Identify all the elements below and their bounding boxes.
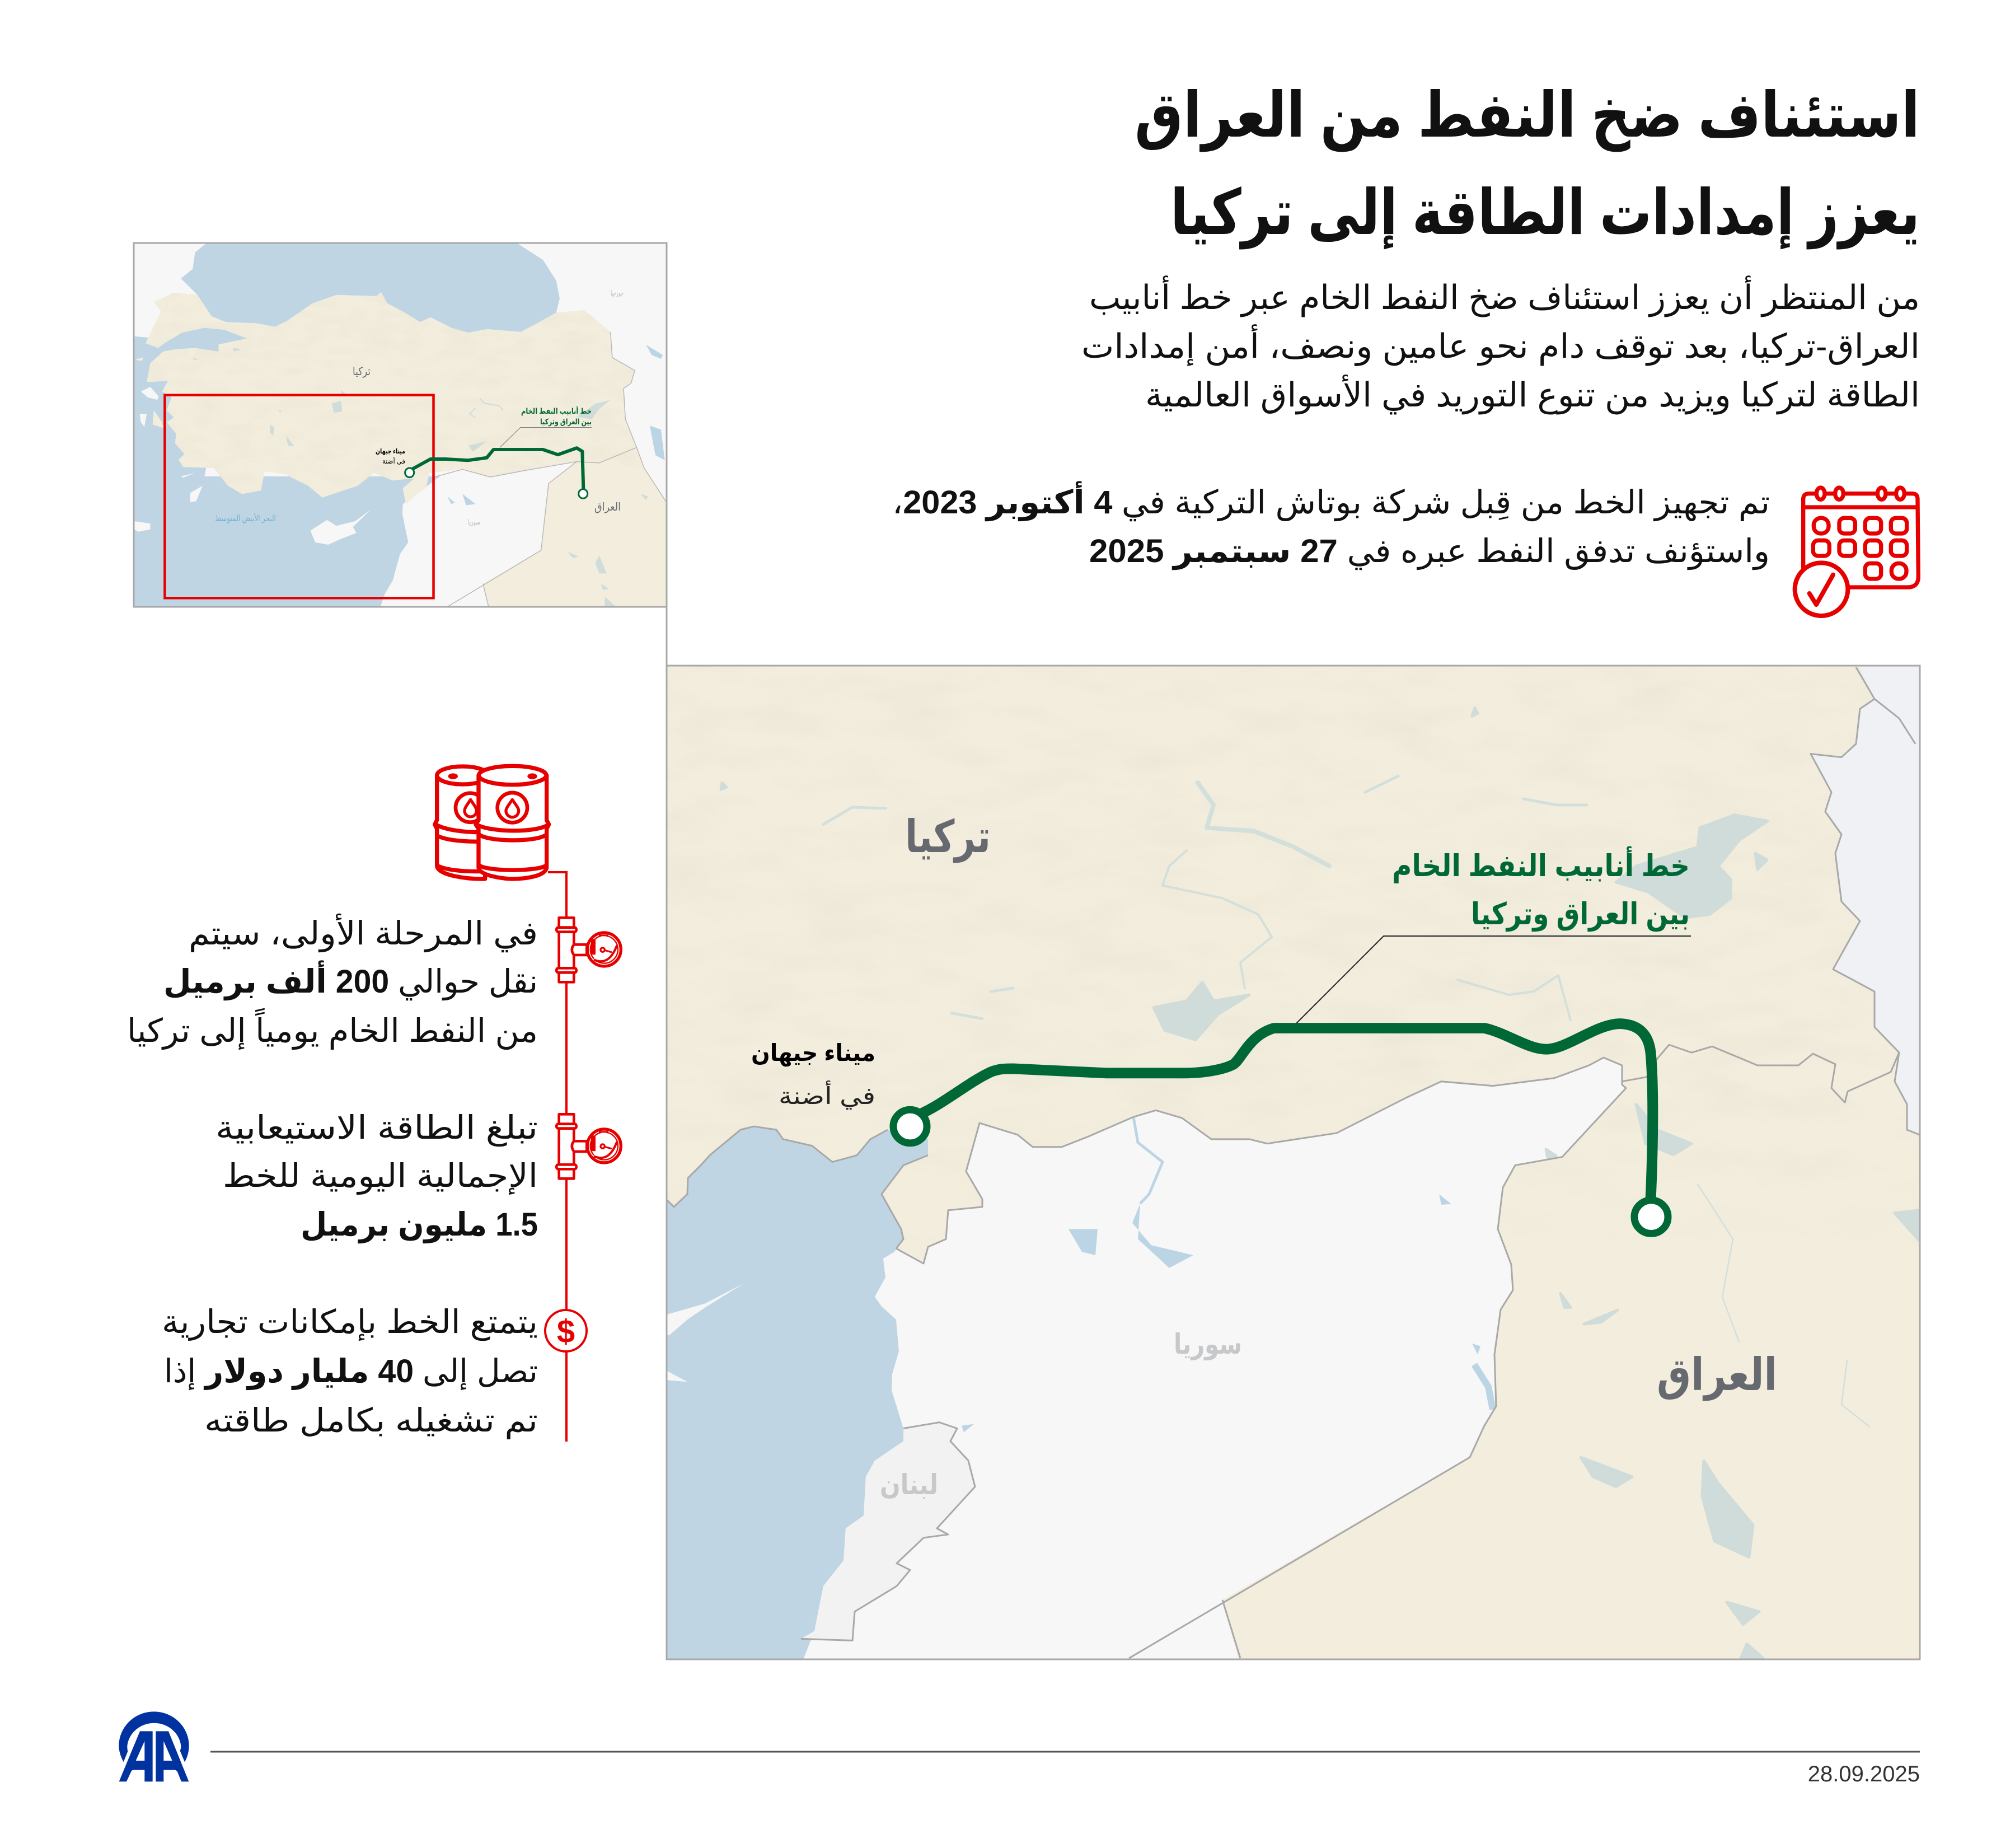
callout: pipeline dates: تم تجهيز الخط من قِبل شركة بوتاش التركية في 4 أكتوبر 2023، [892,481,1770,522]
locator labels: العراق [594,501,621,513]
text block: capacity: تبلغ الطاقة الاستيعابية [215,1110,538,1147]
pipeline [412,448,583,490]
locator labels [215,289,624,527]
text block: revenue: تصل إلى 40 مليار دولار إذا [164,1353,538,1391]
locator labels: البحر الأبيض المتوسط [215,513,276,523]
footer rule [210,1751,1920,1752]
icon: valve 1 [556,918,621,982]
Cyprus [660,1283,744,1382]
pipeline endpoints [405,468,414,478]
text block: first phase: من النفط الخام يومياً إلى تركيا [127,1008,538,1050]
lakes and reservoirs [721,708,1919,1658]
endpoint: Ceyhan [893,1110,927,1143]
Syria, Lebanon and Jordan [801,1058,1626,1665]
pipeline route [921,1024,1653,1200]
text block: revenue [162,1304,538,1439]
text block: first phase [127,913,538,1050]
terrain shading [134,243,667,607]
callout: pipeline dates [892,481,1770,570]
islands and Cyprus [134,387,371,545]
locator labels: في أضنة [382,457,405,465]
text block: revenue: يتمتع الخط بإمكانات تجارية [162,1304,538,1341]
text block: revenue: تم تشغيله بكامل طاقته [204,1402,538,1439]
map labels: سوريا [1174,1328,1242,1361]
intro text [1081,275,1920,415]
locator labels: تركيا [353,366,371,378]
red extent box [165,395,434,598]
borders [667,667,1919,1658]
text block: capacity: 1.5 مليون برميل [301,1206,538,1244]
Black Sea [181,241,560,333]
map labels: في أضنة [779,1080,875,1110]
Mediterranean and Aegean [134,336,440,609]
map labels: لبنان [880,1469,938,1500]
map labels [751,812,1777,1500]
locator labels: سوريا [468,518,480,527]
text block: capacity: الإجمالية اليومية للخط [223,1158,538,1195]
callout: pipeline dates: واستؤنف تدفق النفط عبره في 27 سبتمبر 2025 [1089,533,1770,570]
locator labels: بين العراق وتركيا [540,417,592,427]
locator map [134,241,667,609]
eastern lakes [568,400,648,607]
text block: first phase: نقل حوالي 200 ألف برميل [163,960,538,1001]
Turkish lakes [193,348,487,452]
locator labels: جورجيا [611,289,624,298]
date: 28.09.2025 [1808,1762,1920,1786]
intro text: من المنتظر أن يعزز استئناف ضخ النفط الخام عبر خط أنابيب [1089,275,1920,317]
Mediterranean Sea [644,1126,928,1665]
Iran and neighbours [1811,661,1925,1135]
icon: dollar [545,1310,587,1351]
icon: calendar with check [1795,488,1918,616]
borders [434,332,666,607]
endpoint: Iraq [1634,1200,1668,1233]
connector between locator map and main map [666,607,667,666]
locator labels: ميناء جيهان [376,447,405,455]
map labels: بين العراق وتركيا [1471,897,1690,932]
icon: valve 2 [556,1114,621,1178]
map labels: خط أنابيب النفط الخام [1392,846,1690,883]
map labels: العراق [1657,1350,1777,1401]
main map frame [667,666,1920,1659]
text block: first phase: في المرحلة الأولى، سيتم [189,913,538,953]
title [1135,80,1920,250]
leader line [1296,936,1691,1023]
icon: oil barrels [435,766,549,879]
leader line [500,428,592,447]
title: استئناف ضخ النفط من العراق [1135,80,1920,152]
main map [644,661,1925,1665]
logo: AA [119,1711,189,1781]
locator map frame [134,243,667,607]
intro text: الطاقة لتركيا ويزيد من تنوع التوريد في الأسواق العالمية [1145,375,1920,415]
red pipe line [548,872,566,1442]
locator labels: خط أنابيب النفط الخام [521,406,592,415]
text block: capacity [215,1110,538,1244]
map labels: ميناء جيهان [751,1040,875,1067]
icon: dollar: $ [557,1313,575,1350]
Lebanon [801,1423,975,1640]
land: Turkey and Iraq [146,292,666,609]
Marmara Sea [158,328,247,352]
map labels: تركيا [905,812,991,863]
intro text: العراق-تركيا، بعد توقف دام نحو عامين ونصف، أمن إمدادات [1081,324,1920,366]
